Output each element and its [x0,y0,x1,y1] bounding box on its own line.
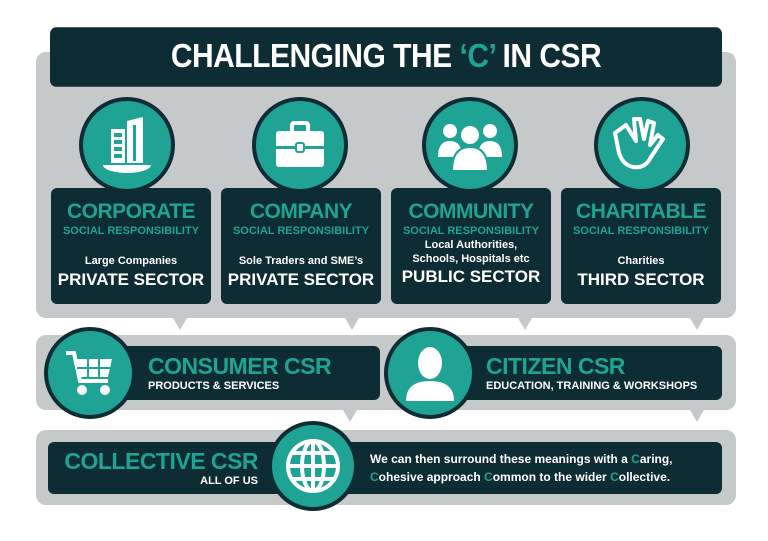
text: collective description: Cohesive approach Common to the wider Collective. [370,470,670,484]
panel: corporate: PRIVATE SECTOR [58,270,204,289]
panel: company: SOCIAL RESPONSIBILITY [233,225,369,237]
panel: consumer: CONSUMER CSR [148,353,331,379]
panel: citizen: EDUCATION, TRAINING & WORKSHOPS [486,380,697,392]
panel: citizen: CITIZEN CSR [486,353,625,379]
panel: community: COMMUNITY [408,200,534,223]
heading: collective: ALL OF US [200,475,258,487]
panel: charitable [561,188,721,304]
panel: company: Sole Traders and SME’s [239,255,363,267]
arrows: middle [343,410,704,422]
panel: company: COMPANY [250,200,352,223]
background panel: bottom [36,430,736,505]
panel: community: Local Authorities, [425,239,517,251]
panel: corporate: Large Companies [85,255,177,267]
panel: company: PRIVATE SECTOR [228,270,374,289]
panel: charitable: Charities [617,255,665,267]
panel: community: SOCIAL RESPONSIBILITY [403,225,539,237]
heading: collective: COLLECTIVE CSR [64,448,258,474]
panel: community: Schools, Hospitals etc [412,253,530,265]
panel: consumer: PRODUCTS & SERVICES [148,380,279,392]
icon: briefcase [252,97,348,193]
icon: person [384,327,476,419]
arrows [173,318,704,330]
background panel: top [36,52,736,318]
panel: charitable: THIRD SECTOR [577,270,705,289]
panel: charitable: SOCIAL RESPONSIBILITY [573,225,709,237]
icon: people [422,97,518,193]
panel: company [221,188,381,304]
title: CHALLENGING THE ‘C’ IN CSR [171,38,601,75]
panel: community: PUBLIC SECTOR [402,267,540,286]
panel: collective [48,442,722,494]
text: collective description: We can then surround these meanings with a Caring, [370,452,673,466]
panel: citizen [420,346,722,400]
panel: corporate [51,188,211,304]
title [50,27,722,87]
icon: cart [44,327,136,419]
panel: community [391,188,551,304]
background panel: middle [36,335,736,410]
icon: building [79,97,175,193]
heading: collective [64,448,258,487]
panel: corporate: SOCIAL RESPONSIBILITY [63,225,199,237]
panel: charitable: CHARITABLE [576,200,706,223]
icon: hand [594,97,690,193]
icon: globe [268,421,358,511]
text: collective description [370,452,673,484]
panel: consumer [72,346,380,400]
panel: corporate: CORPORATE [67,200,195,223]
